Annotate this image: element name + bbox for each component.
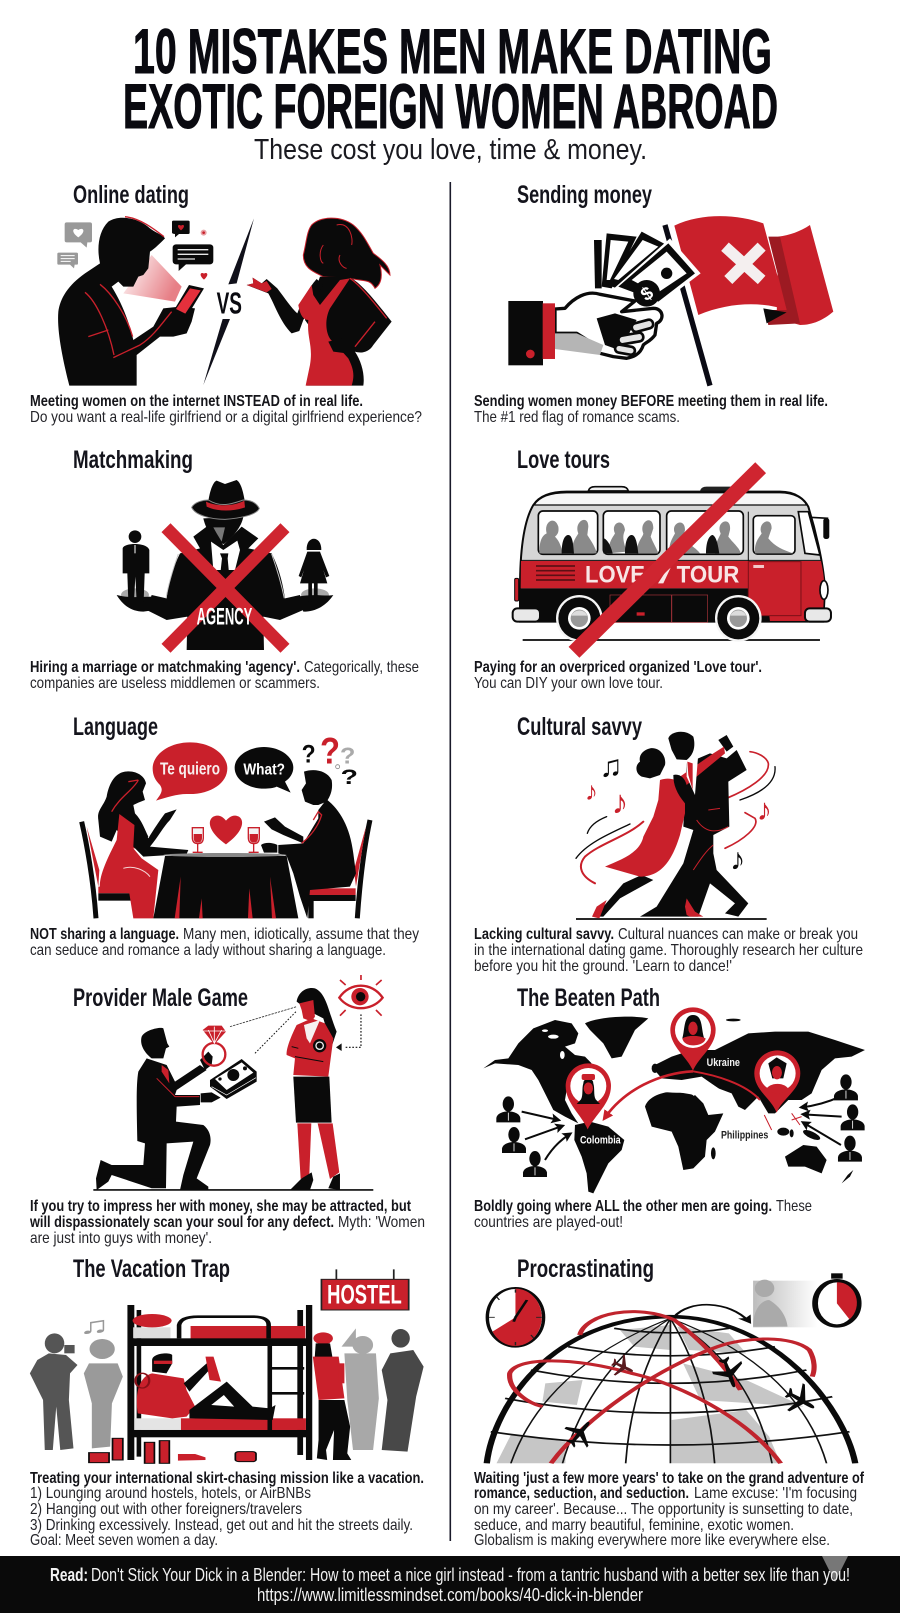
panel: the beaten path: [474, 984, 865, 1231]
illustration: tango dancers: ♪: [730, 842, 745, 876]
illustration: couple at table with speech bubbles: What?: [243, 761, 285, 778]
caption: matchmaking: [30, 659, 419, 692]
panel: sending money: [474, 181, 833, 426]
caption: the vacation trap: 3) Drinking excessively. Instead, get out and hit the streets daily.: [30, 1517, 413, 1534]
illustration: hostel bunk bed party: ♫: [79, 1312, 110, 1339]
caption: matchmaking: companies are useless middlemen or scammers.: [30, 675, 320, 692]
heading: online dating: Online dating: [73, 181, 189, 209]
illustration: globe with clocks and planes: [487, 1273, 859, 1463]
caption: language: NOT sharing a language.: [30, 926, 179, 943]
subtitle: These cost you love, time & money.: [254, 134, 647, 166]
caption: procrastinating: romance, seduction, and seduction.: [474, 1485, 689, 1502]
caption: language: [30, 926, 419, 959]
caption: provider male game: are just into guys with money'.: [30, 1230, 212, 1247]
caption: the beaten path: [474, 1198, 812, 1231]
heading: provider male game: Provider Male Game: [73, 984, 248, 1012]
panel: language: [30, 713, 419, 959]
illustration: tango dancers: ♪: [612, 784, 628, 821]
illustration: kneeling man offering ring and money: [93, 975, 383, 1190]
heading: sending money: Sending money: [517, 181, 652, 209]
caption: procrastinating: seduce, and marry beautiful, feminine, exotic women.: [474, 1517, 794, 1534]
panel: the vacation trap: [30, 1255, 424, 1549]
illustration: tango dancers: ♪: [585, 776, 598, 806]
heading: procrastinating: Procrastinating: [517, 1255, 654, 1283]
illustration: crossed-out love tour bus: LOVE: [585, 561, 645, 588]
caption: sending money: The #1 red flag of romance scams.: [474, 409, 680, 426]
caption: online dating: [30, 393, 422, 426]
footer bar: Read:: [50, 1564, 88, 1585]
caption: matchmaking: Hiring a marriage or matchmaking 'agency'.: [30, 659, 300, 676]
heading: cultural savvy: Cultural savvy: [517, 713, 642, 741]
illustration: couple at table with speech bubbles: ?: [320, 729, 340, 771]
illustration: crossed-out love tour bus: TOUR: [677, 561, 739, 588]
caption: the vacation trap: 2) Hanging out with other foreigners/travelers: [30, 1501, 302, 1518]
illustration: crossed-out agency man: [117, 480, 333, 650]
caption: cultural savvy: Lacking cultural savvy.: [474, 926, 614, 943]
panel: online dating: [30, 181, 422, 426]
heading: the beaten path: The Beaten Path: [517, 984, 660, 1012]
illustration: world map with pins: Colombia: [580, 1134, 621, 1146]
caption: love tours: [474, 659, 762, 692]
illustration: couple at table with speech bubbles: [82, 729, 370, 918]
caption: procrastinating: [474, 1470, 865, 1549]
caption: provider male game: [29, 1198, 425, 1247]
illustration: hostel bunk bed party: HOSTEL: [327, 1279, 402, 1309]
illustration: tango dancers: [576, 732, 775, 919]
caption: matchmaking: Categorically, these: [304, 659, 419, 676]
heading: the vacation trap: The Vacation Trap: [73, 1255, 230, 1283]
illustration: world map with pins: Philippines: [721, 1130, 768, 1142]
caption: procrastinating: Lame excuse: 'I'm focusing: [694, 1485, 857, 1502]
caption: the beaten path: These: [776, 1198, 812, 1215]
panel: matchmaking: [30, 446, 419, 692]
panel: procrastinating: [474, 1255, 865, 1549]
illustration: man with phone vs real woman: [57, 217, 392, 386]
caption: language: can seduce and romance a lady without sharing a language.: [30, 942, 386, 959]
caption: love tours: Paying for an overpriced organized 'Love tour'.: [474, 659, 762, 676]
caption: the beaten path: Boldly going where ALL the other men are going.: [474, 1198, 772, 1215]
caption: cultural savvy: Cultural nuances can make or break you: [618, 926, 858, 943]
caption: online dating: Meeting women on the internet INSTEAD of in real life.: [30, 393, 363, 410]
caption: cultural savvy: [474, 926, 863, 975]
caption: language: Many men, idiotically, assume that they: [183, 926, 419, 943]
caption: cultural savvy: before you hit the ground. 'Learn to dance!': [474, 958, 732, 975]
caption: procrastinating: Globalism is making everywhere more like everywhere else.: [474, 1532, 830, 1549]
caption: provider male game: If you try to impress her with money, she may be attracted, but: [30, 1198, 412, 1215]
caption: the vacation trap: 1) Lounging around hostels, hotels, or AirBNBs: [30, 1485, 311, 1502]
footer bar: https://www.limitlessmindset.com/books/40-dick-in-blender: [257, 1584, 643, 1605]
title: [123, 17, 778, 142]
illustration: tango dancers: ♫: [599, 750, 622, 784]
caption: love tours: You can DIY your own love tour.: [474, 675, 663, 692]
heading: love tours: Love tours: [517, 446, 610, 474]
illustration: crossed-out love tour bus: [513, 468, 831, 652]
caption: online dating: Do you want a real-life girlfriend or a digital girlfriend experience?: [30, 409, 422, 426]
illustration: couple at table with speech bubbles: ?: [302, 741, 316, 769]
caption: provider male game: will dispassionately scan your soul for any defect.: [29, 1214, 334, 1231]
illustration: tango dancers: ♪: [757, 793, 772, 827]
caption: the vacation trap: Treating your international skirt-chasing mission like a vacation.: [30, 1470, 424, 1487]
caption: sending money: [474, 393, 828, 426]
footer bar: [0, 1556, 900, 1613]
illustration: man with phone vs real woman: VS: [217, 286, 242, 320]
illustration: couple at table with speech bubbles: ?: [341, 765, 358, 789]
illustration: crossed-out agency man: AGENCY: [197, 603, 252, 630]
heading: language: Language: [73, 713, 158, 741]
illustration: hand with money and red flag: $: [636, 282, 658, 305]
panel: provider male game: [29, 975, 425, 1247]
illustration: hostel bunk bed party: [30, 1269, 424, 1463]
caption: provider male game: Myth: 'Women: [338, 1214, 425, 1231]
heading: matchmaking: Matchmaking: [73, 446, 193, 474]
illustration: hand with money and red flag: [508, 216, 833, 386]
caption: the beaten path: countries are played-out!: [474, 1214, 623, 1231]
caption: the vacation trap: [30, 1470, 424, 1549]
caption: the vacation trap: Goal: Meet seven women a day.: [30, 1532, 218, 1549]
panel: cultural savvy: [474, 713, 863, 975]
panel: love tours: [474, 446, 831, 692]
illustration: world map with pins: [483, 1007, 865, 1193]
illustration: world map with pins: Ukraine: [707, 1057, 740, 1069]
illustration: couple at table with speech bubbles: Te quiero: [160, 758, 220, 778]
illustration: couple at table with speech bubbles: ?: [340, 742, 355, 768]
